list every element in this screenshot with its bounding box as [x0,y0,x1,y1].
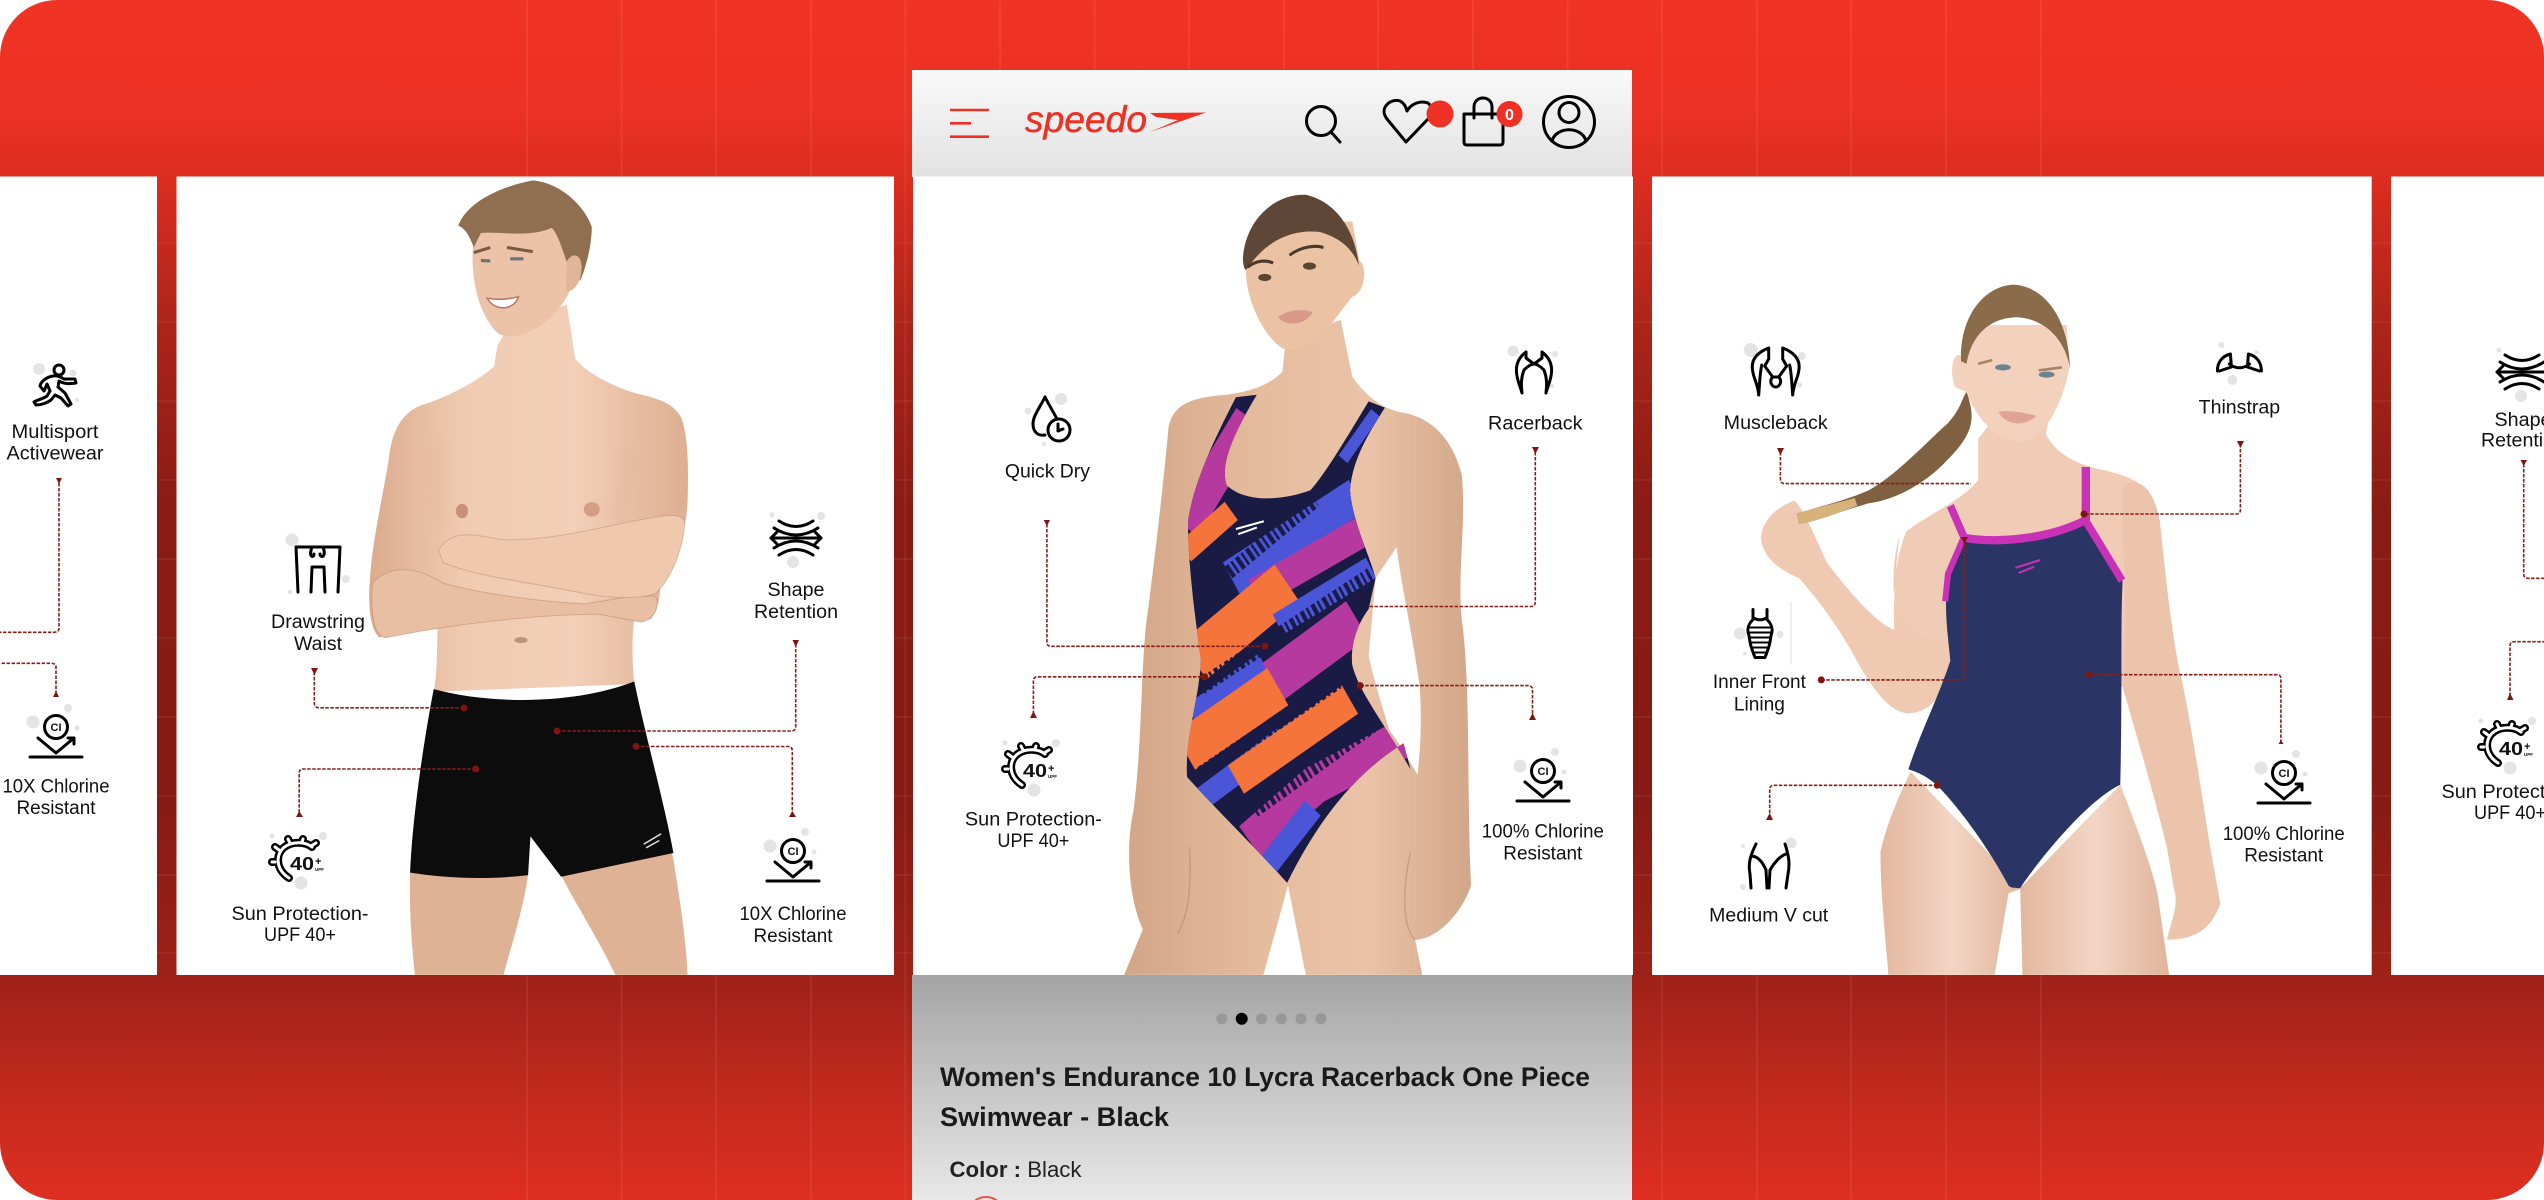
connector: 100% chlorine [2086,671,2284,744]
icon: shape retention [2496,348,2544,402]
connector: sun protection [1030,673,1208,718]
icon: medium V cut [1740,838,1796,890]
label: 100% Chlorine Resistant: Resistant [1503,844,1583,865]
icon: sun protection UPF 40+: 40 [290,854,314,874]
label: Sun Protection UPF 40+: UPF 40+ [997,831,1069,852]
icon: sun protection UPF 40+ [270,832,327,890]
icon: shape retention [770,512,825,568]
label: Drawstring Waist: Drawstring [271,612,365,633]
connector: sun protection [2507,642,2544,700]
connector: shape retention [554,640,799,734]
icon: sun protection UPF 40+: UPF [1048,774,1057,779]
label: Medium V cut: Medium V cut [1709,906,1829,927]
icon: chlorine: CI [1538,766,1548,778]
icon: wishlist heart [1384,100,1454,142]
logo: speedo [1025,99,1206,140]
photo: female model in patterned swimsuit [1124,195,1471,975]
connector: thinstrap [2080,441,2244,518]
label: Sun Protection UPF 40+ [965,810,1102,852]
icon: racerback [1508,346,1558,393]
label: 10X Chlorine Resistant: Resistant [754,926,833,947]
panel: men's swim shorts card [176,176,894,975]
photo: girl in navy swimsuit [1761,285,2220,975]
icon: quick dry [1024,393,1070,446]
label: 10X Chlorine Resistant: 10X Chlorine [740,904,846,925]
icon: drawstring waist [286,534,350,594]
product title [940,1062,1590,1132]
colour swatch [968,1197,1004,1200]
label: Muscleback: Muscleback [1724,413,1828,434]
panel: far-right cropped card [2391,176,2544,975]
icon: inner front lining [1734,602,1791,664]
label: Sun Protection UPF 40+ [232,904,368,946]
connector: racerback [1368,447,1539,606]
label: Sun Protection UPF 40+: Sun Protection- [232,904,368,925]
icon: chlorine: CI [788,846,798,858]
label: Multisport Activewear: Activewear [6,443,104,464]
label: Inner Front Lining: Inner Front [1713,672,1807,693]
label: Quick Dry: Quick Dry [1005,461,1090,482]
connector: muscleback [1777,448,1971,484]
connector: 100% chlorine [1357,682,1536,720]
product title: Swimwear - Black [940,1102,1170,1132]
label: 10X Chlorine Resistant [2,777,110,819]
icon: user account [1544,96,1594,148]
icon: shopping bag [1464,98,1522,145]
icon: sun protection UPF 40+ [2478,717,2536,774]
label: Sun Protection UPF 40+ [2442,782,2544,824]
icon: chlorine [26,704,82,757]
connector: multisport [0,478,62,632]
label: Shape Retention [754,580,838,623]
label: 100% Chlorine Resistant: 100% Chlorine [2223,824,2345,845]
product title: Women's Endurance 10 Lycra Racerback One Piece [940,1062,1590,1092]
carousel dots [1216,1013,1326,1025]
label: Shape Retention: Retention [754,602,838,623]
label: Inner Front Lining: Lining [1734,694,1785,715]
label: 100% Chlorine Resistant [2223,824,2345,867]
connector: drawstring [311,668,468,712]
panel: phone header bar [912,70,1632,177]
connector: shape retention [2520,460,2544,578]
label: Multisport Activewear: Multisport [12,422,99,443]
label: Sun Protection UPF 40+: Sun Protection- [965,810,1102,831]
icon: multisport runner [33,363,79,406]
label: 100% Chlorine Resistant [1482,822,1604,865]
label: Racerback: Racerback [1488,413,1583,434]
label: Thinstrap: Thinstrap [2199,397,2280,418]
label: Sun Protection UPF 40+: UPF 40+ [264,925,336,946]
panel: far-left cropped card [0,176,157,975]
connector: sun protection [296,766,479,817]
label: Shape Retention [2481,410,2544,452]
icon: sun protection UPF 40+: + [2524,741,2530,753]
label: 10X Chlorine Resistant: Resistant [16,798,96,819]
label: Drawstring Waist: Waist [294,634,343,655]
icon: chlorine [764,828,819,881]
icon: chlorine [1514,748,1569,801]
label: Multisport Activewear [6,422,104,464]
icon: sun protection UPF 40+ [1002,739,1060,796]
icon: sun protection UPF 40+: 40 [1023,761,1047,781]
panel: phone product details footer [912,975,1632,1200]
icon: sun protection UPF 40+: UPF [2524,752,2533,757]
logo: speedo: speedo [1025,99,1147,140]
icon: search [1306,106,1340,142]
icon: chlorine: CI [50,722,62,734]
panel: centre card women's swimsuit [913,176,1633,975]
icon: sun protection UPF 40+: + [315,856,321,868]
connector: 10X chlorine [0,663,59,697]
icon: hamburger menu [950,110,989,137]
icon: sun protection UPF 40+: + [1048,763,1054,775]
icon: sun protection UPF 40+: UPF [315,867,324,872]
colour line: Color : Black [950,1157,1082,1182]
icon: thinstrap [2217,342,2261,385]
label: 10X Chlorine Resistant [740,904,846,947]
icon: sun protection UPF 40+: 40 [2499,739,2523,759]
label: Inner Front Lining [1713,672,1807,715]
icon: chlorine [2254,750,2310,803]
label: Shape Retention: Shape [768,580,824,601]
label: 10X Chlorine Resistant: 10X Chlorine [2,777,110,798]
connector: 10X chlorine [632,743,796,817]
icon: muscleback [1744,343,1806,395]
connector: inner front lining [1818,537,1968,683]
panel: right card girl's swimsuit [1652,176,2372,975]
label: 100% Chlorine Resistant: Resistant [2244,846,2324,867]
icon: shopping bag: 0 [1505,107,1514,124]
label: 100% Chlorine Resistant: 100% Chlorine [1482,822,1604,842]
connector: quick dry [1044,520,1268,650]
icon: chlorine: CI [2278,768,2290,780]
label: Drawstring Waist [271,612,365,655]
photo: male model in black shorts [369,180,688,975]
connector: medium V cut [1766,782,1941,820]
